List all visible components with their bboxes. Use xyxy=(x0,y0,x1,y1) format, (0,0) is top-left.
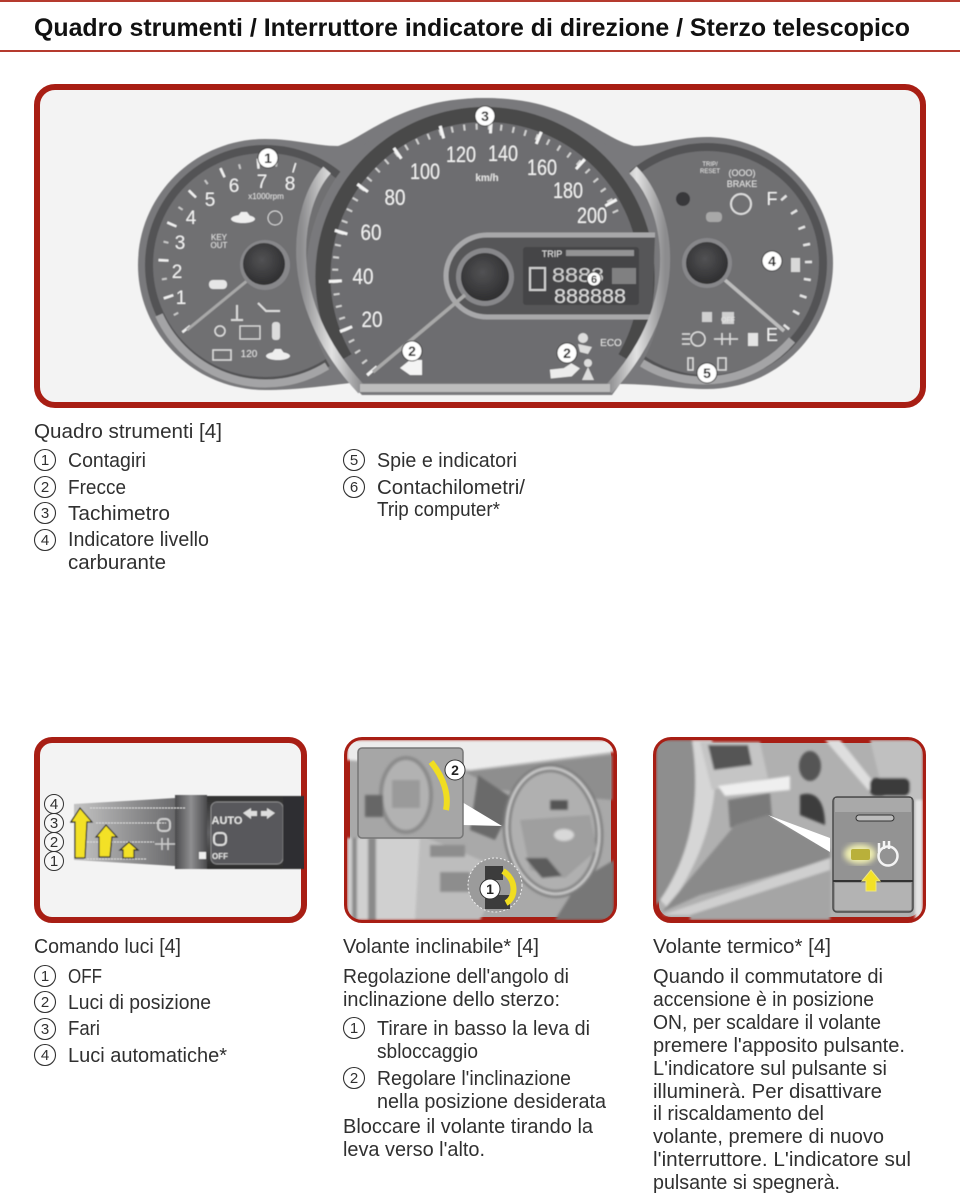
text block: instrument legend: Trip computer* xyxy=(377,499,500,521)
speed labels: 160 xyxy=(527,155,557,180)
panel: light stalk xyxy=(37,740,305,920)
speed labels: 40 xyxy=(352,264,374,289)
text block: light control xyxy=(34,936,227,1067)
gauge: fuel and warning lights xyxy=(587,143,827,383)
marker: 1: 1 xyxy=(264,150,272,166)
position numbers: 2 xyxy=(50,834,58,851)
text block: heated steering: pulsante si spegnerà. xyxy=(653,1172,840,1194)
yellow arrows xyxy=(71,808,138,858)
position numbers: 4 xyxy=(50,796,58,813)
text block: tilt steering: leva verso l'alto. xyxy=(343,1139,485,1161)
marker: 2: 2 xyxy=(408,343,416,359)
speed labels: 60 xyxy=(360,220,382,245)
gauge: tachometer: 120 xyxy=(241,349,258,360)
marker: 4: 4 xyxy=(768,253,776,269)
text block: tilt steering: inclinazione dello sterzo: xyxy=(343,989,560,1011)
gauge: fuel and warning lights: BRAKE xyxy=(727,179,757,189)
marker: 5 xyxy=(697,363,717,383)
text block: tilt steering: sbloccaggio xyxy=(377,1041,478,1063)
panel: instrument cluster xyxy=(34,84,926,408)
title: Quadro strumenti / Interruttore indicatore di direzione / Sterzo telescopico xyxy=(34,14,910,42)
text block: heated steering: L'indicatore sul pulsante si xyxy=(653,1058,887,1080)
gauge: tachometer: 2 xyxy=(172,262,182,283)
text block: instrument legend: Indicatore livello xyxy=(68,529,209,551)
marker: 1 xyxy=(258,148,278,168)
title rule xyxy=(0,50,960,52)
gauge: fuel and warning lights: RESET xyxy=(700,169,720,175)
position numbers xyxy=(44,794,64,870)
stalk symbols: AUTO xyxy=(212,815,243,827)
indicator arrows and warning icons: ECO xyxy=(600,338,622,349)
inset: heater button xyxy=(833,797,913,912)
gauge: fuel and warning lights: F xyxy=(766,189,778,209)
text block: instrument legend: Contagiri xyxy=(68,450,146,472)
top rule xyxy=(0,0,960,2)
marker: 3 xyxy=(475,106,495,126)
speed labels: 100 xyxy=(410,159,440,184)
text block: instrument legend: 2 xyxy=(41,479,49,496)
gauge: fuel and warning lights: (OOO) xyxy=(728,168,756,178)
text block: heated steering xyxy=(653,936,911,1194)
text block: light control: 4 xyxy=(41,1047,49,1064)
cluster body xyxy=(138,98,833,395)
speed labels: 200 xyxy=(577,203,607,228)
text block: tilt steering: 1 xyxy=(350,1020,358,1037)
text block: instrument legend: Quadro strumenti [4] xyxy=(34,421,222,443)
position numbers: 3 xyxy=(50,815,58,832)
text block: heated steering: Volante termico* [4] xyxy=(653,936,831,958)
text block: heated steering: accensione è in posizione xyxy=(653,989,874,1011)
text block: heated steering: ON, per scaldare il volante xyxy=(653,1012,881,1034)
needle: speedometer xyxy=(373,295,465,372)
text block: instrument legend: Spie e indicatori xyxy=(377,450,517,472)
gauge: tachometer xyxy=(145,145,385,385)
gauge: tachometer: 1 xyxy=(176,288,186,309)
gauge: tachometer: 7 xyxy=(257,172,267,193)
trip computer display: 888888 xyxy=(554,286,626,308)
text block: heated steering: illuminerà. Per disattivare xyxy=(653,1081,882,1103)
text block: tilt steering: Tirare in basso la leva di xyxy=(377,1018,590,1040)
position numbers: 1 xyxy=(50,853,58,870)
gauge: tachometer: 4 xyxy=(186,208,197,229)
text block: instrument legend: 5 xyxy=(350,452,358,469)
gauge: tachometer: 3 xyxy=(175,233,185,254)
stalk symbols: OFF xyxy=(212,852,228,861)
text block: heated steering: Quando il commutatore di xyxy=(653,966,883,988)
text block: light control: Luci automatiche* xyxy=(68,1045,227,1067)
text block: tilt steering: nella posizione desiderata xyxy=(377,1091,607,1113)
text block: instrument legend: Frecce xyxy=(68,477,126,499)
marker: 4 xyxy=(762,251,782,271)
trip computer display xyxy=(446,235,655,317)
text block: tilt steering: Regolare l'inclinazione xyxy=(377,1068,571,1090)
text block: light control: Fari xyxy=(68,1018,100,1040)
speed labels: 140 xyxy=(488,141,518,166)
text block: instrument legend: 4 xyxy=(41,532,49,549)
text block: heated steering: l'interruttore. L'indicatore sul xyxy=(653,1149,911,1171)
gauge: fuel and warning lights: E xyxy=(766,325,778,345)
dashboard backdrop xyxy=(656,740,695,905)
inset: tilt direction xyxy=(358,748,465,838)
marker: 2 right: 2 xyxy=(563,345,571,361)
text block: heated steering: il riscaldamento del xyxy=(653,1103,824,1125)
gauge: tachometer: 8 xyxy=(285,174,295,195)
speed labels: 20 xyxy=(362,307,382,332)
text block: light control: Comando luci [4] xyxy=(34,936,181,958)
trip computer display: TRIP xyxy=(542,249,562,259)
speed labels: 180 xyxy=(553,178,583,203)
panel: heated steering wheel xyxy=(656,740,923,920)
text block: tilt steering: 2 xyxy=(350,1070,358,1087)
text block: light control: 3 xyxy=(41,1021,49,1038)
lever detail xyxy=(468,858,522,912)
gauge: tachometer: 5 xyxy=(205,190,215,211)
stalk body xyxy=(205,796,305,869)
text block: heated steering: premere l'apposito pulsante. xyxy=(653,1035,905,1057)
text block: heated steering: volante, premere di nuovo xyxy=(653,1126,884,1148)
marker: 6: 6 xyxy=(591,274,597,286)
text block: instrument legend xyxy=(34,421,525,574)
text block: instrument legend: Contachilometri/ xyxy=(377,477,525,499)
stalk symbols xyxy=(84,808,275,861)
indicator arrows and warning icons xyxy=(400,333,622,380)
marker: 6 xyxy=(587,272,601,286)
text block: light control: 2 xyxy=(41,994,49,1011)
speed labels xyxy=(352,141,607,332)
gauge: fuel and warning lights: TRIP/ xyxy=(702,162,718,168)
trip computer display: 8888 xyxy=(552,265,604,287)
text block: tilt steering: Bloccare il volante tirando la xyxy=(343,1116,594,1138)
gauge: fuel and warning lights: OFF xyxy=(721,317,735,324)
gauge: tachometer: x1000rpm xyxy=(248,192,284,201)
text block: instrument legend: carburante xyxy=(68,552,166,574)
marker: 2 right xyxy=(557,343,577,363)
gauge: speedometer xyxy=(307,98,660,383)
steering wheel xyxy=(501,764,605,898)
inset: tilt direction: 2 xyxy=(451,762,459,778)
speed labels: 120 xyxy=(446,142,476,167)
marker: 3: 3 xyxy=(481,108,489,124)
gauge: tachometer: KEY xyxy=(211,233,228,242)
silver bezels xyxy=(301,170,665,392)
marker: 2 xyxy=(402,341,422,361)
text block: instrument legend: 3 xyxy=(41,505,49,522)
text block: tilt steering: Regolazione dell'angolo di xyxy=(343,966,569,988)
callout wedge xyxy=(768,815,830,852)
speed labels: km/h xyxy=(475,173,499,184)
text block: light control: 1 xyxy=(41,968,49,985)
text block: light control: OFF xyxy=(68,966,102,988)
text block: tilt steering: Volante inclinabile* [4] xyxy=(343,936,539,958)
lever detail: 1 xyxy=(486,881,494,897)
text block: light control: Luci di posizione xyxy=(68,992,211,1014)
windshield xyxy=(347,740,614,770)
speed labels: 80 xyxy=(384,185,406,210)
callout wedge xyxy=(462,802,502,826)
text block: instrument legend: 6 xyxy=(350,479,358,496)
text block: instrument legend: Tachimetro xyxy=(68,503,170,525)
panel: tilt steering xyxy=(347,740,614,920)
gauge: tachometer: OUT xyxy=(211,241,228,250)
text block: instrument legend: 1 xyxy=(41,452,49,469)
gauge: tachometer: 6 xyxy=(229,176,239,197)
marker: 5: 5 xyxy=(703,365,711,381)
text block: tilt steering xyxy=(343,936,607,1161)
